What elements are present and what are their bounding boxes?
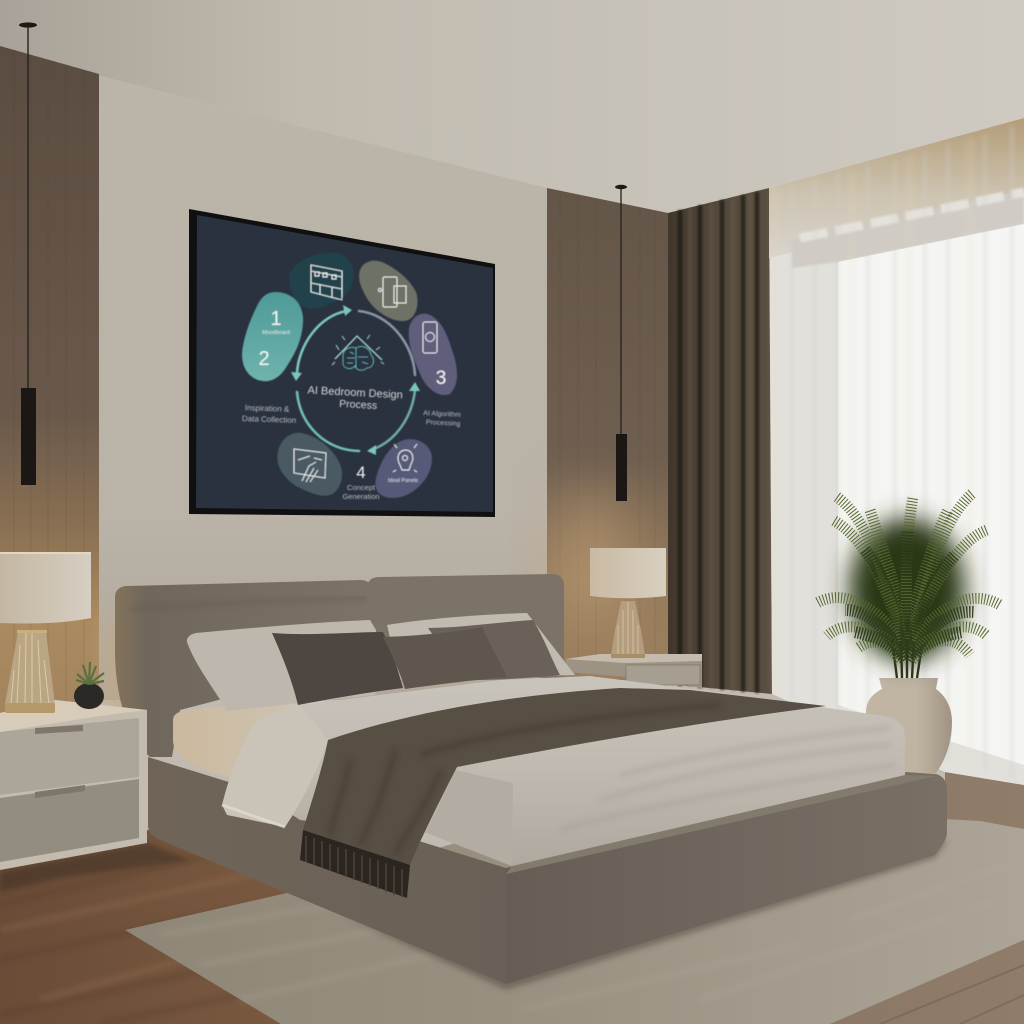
wall art: AI Bedroom Design Process infographic [189, 209, 495, 517]
blob: olive with screens icon [359, 261, 418, 321]
icon: floor plan [311, 265, 342, 300]
blob: purple-blue with lightbulb icon [375, 439, 432, 498]
step 3 label: Processing [426, 419, 461, 428]
center title [307, 385, 403, 412]
back wall [98, 76, 547, 700]
duvet folded corner [222, 705, 328, 827]
left wood panel [0, 46, 99, 720]
step 1 label [242, 403, 296, 425]
step 1 label: Inspiration & [245, 403, 290, 414]
dark curtain [668, 188, 772, 694]
white pillow left [187, 620, 377, 711]
right nightstand [566, 654, 702, 688]
step 4 label [342, 463, 380, 501]
right panel lamp glow [550, 490, 630, 630]
canvas [196, 215, 493, 512]
warm top band [769, 118, 1024, 258]
center title: Process [339, 398, 377, 412]
left wall lamp glow [101, 615, 149, 725]
icon: tablet with hand [294, 449, 326, 482]
blob label: Moodboard [262, 330, 290, 336]
pendant lamp right [615, 185, 627, 501]
number 2: 2 [258, 348, 270, 370]
step 4 label: Generation [342, 492, 380, 501]
floor [0, 772, 1024, 1024]
blob: purple with phone icon and number 3 [409, 314, 457, 395]
throw fringe [300, 830, 410, 898]
sheer base [769, 118, 1024, 785]
white pillow right [387, 613, 575, 680]
left headboard cushion [115, 580, 372, 757]
nightstand frame [0, 700, 147, 870]
icon: brain house [332, 335, 384, 370]
grey pillow left [272, 632, 403, 705]
right table lamp [590, 548, 666, 658]
vase [866, 678, 952, 773]
sheer curtain and window [769, 118, 1024, 785]
icon: lightbulb [393, 444, 417, 472]
step 3 label: AI Algorithm [423, 410, 461, 419]
center title: AI Bedroom Design [307, 385, 403, 401]
left nightstand [0, 700, 147, 870]
bed base left face [148, 757, 506, 984]
grey pillow center [383, 627, 507, 689]
step 4 label: Concept [347, 483, 376, 492]
blob caption: Ideal Panels [388, 478, 418, 484]
step 1 label: Data Collection [242, 414, 296, 425]
upper window pane [792, 190, 1024, 268]
plant [817, 493, 1000, 678]
drawer top [0, 718, 139, 795]
step 4 label: 4 [356, 463, 366, 482]
number 3: 3 [436, 368, 446, 389]
frame [189, 209, 495, 517]
right wood panel [547, 188, 668, 680]
drawer bottom [0, 779, 139, 862]
duvet top and front [240, 676, 905, 866]
nightstand top [0, 700, 147, 732]
duvet side face [427, 770, 513, 866]
blob: slate with drawing icon [277, 433, 342, 496]
icon: overlapping devices [378, 277, 406, 307]
rug [125, 800, 1024, 1024]
right headboard cushion [367, 574, 564, 680]
blob: dark teal with layout icon [289, 253, 353, 309]
grey pillow back right [428, 620, 560, 680]
room shell [0, 0, 1024, 720]
throw blanket [303, 688, 826, 865]
ceiling [0, 0, 1024, 213]
pendant lamp left [19, 22, 37, 485]
number 1: 1 [270, 308, 282, 330]
icon: phone [423, 322, 437, 353]
bright window [838, 224, 1024, 765]
process ring arrows [291, 305, 420, 455]
bed base right face [506, 772, 947, 984]
left table lamp [0, 552, 91, 713]
small potted plant [74, 662, 104, 709]
fitted sheet [173, 695, 360, 780]
blob: step 1 and 2 teal [242, 292, 303, 381]
step 3 label [423, 410, 461, 428]
bed [115, 574, 947, 984]
